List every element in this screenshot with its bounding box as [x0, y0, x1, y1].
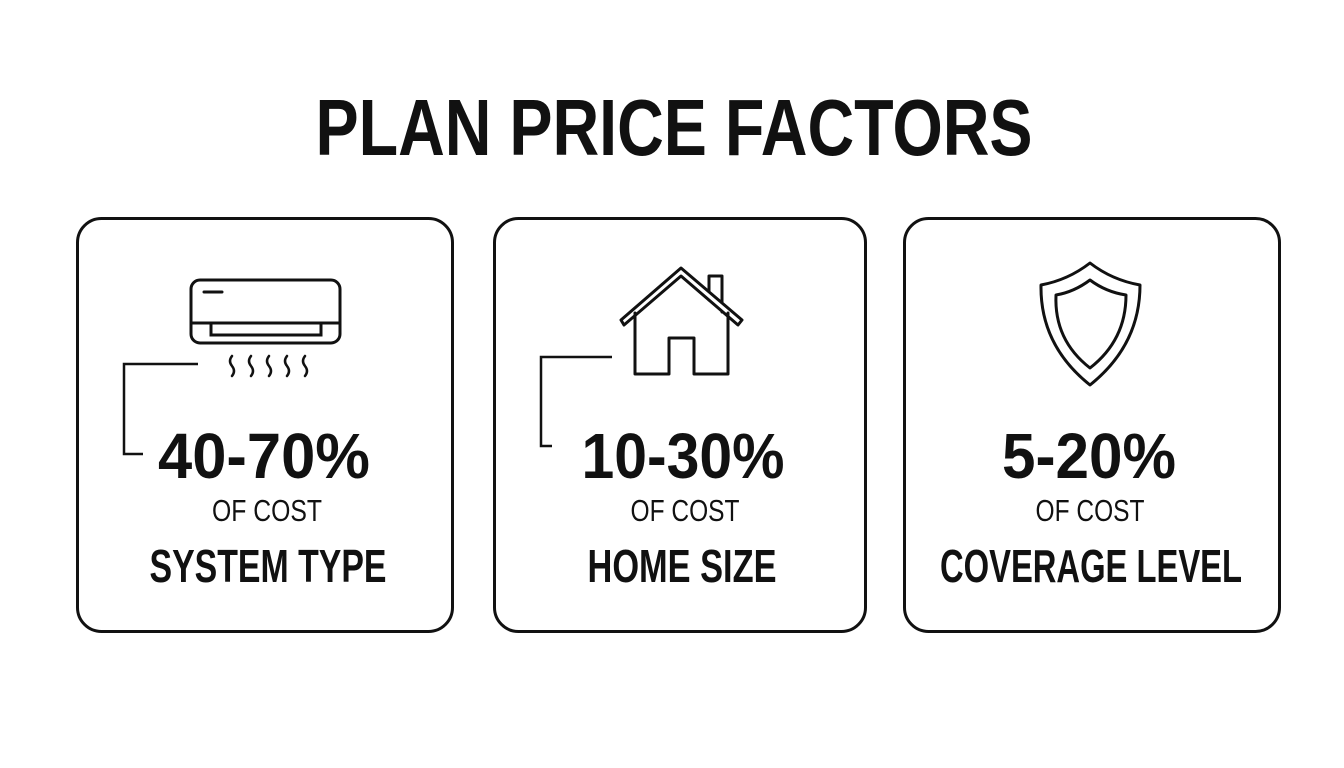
connector line	[124, 364, 198, 454]
icon: house	[621, 268, 742, 374]
label: SYSTEM TYPE	[150, 540, 386, 592]
panel: system type	[78, 218, 452, 632]
percentage: 5-20%	[1002, 420, 1176, 492]
icon: shield	[1041, 263, 1140, 385]
percentage: 40-70%	[158, 420, 370, 492]
percentage: 10-30%	[582, 420, 784, 492]
panel: coverage level	[904, 218, 1280, 632]
subtext: OF COST	[630, 493, 740, 528]
subtext: OF COST	[1036, 493, 1145, 528]
title: PLAN PRICE FACTORS	[316, 83, 1032, 172]
panel: home size	[494, 218, 866, 632]
subtext: OF COST	[212, 493, 322, 528]
icon: air conditioner	[191, 280, 340, 376]
label: HOME SIZE	[588, 540, 776, 592]
connector line	[541, 357, 612, 446]
